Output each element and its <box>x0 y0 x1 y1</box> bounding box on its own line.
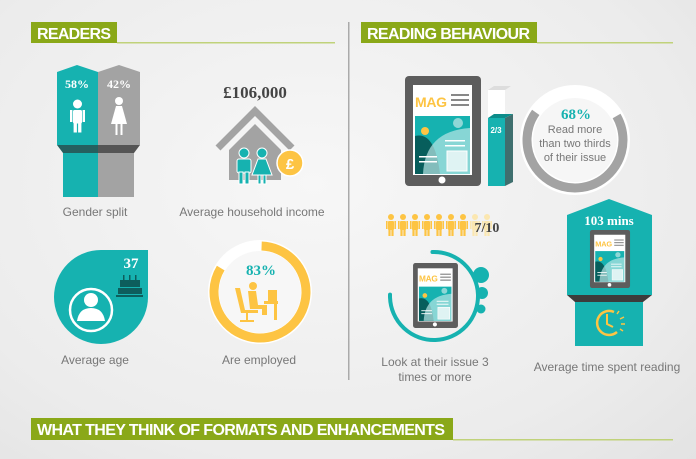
panel: employed: Are employed <box>222 353 296 367</box>
panel: read two thirds: Read more <box>548 124 602 136</box>
panel: gender split <box>57 65 140 219</box>
panel: employed <box>208 240 312 367</box>
panel: look three times: 7/10 <box>475 221 499 236</box>
panel: time spent reading: 103 mins <box>584 213 634 228</box>
heading: reading behaviour: READING BEHAVIOUR <box>367 26 530 43</box>
panel: employed: 83% <box>246 263 276 279</box>
heading: formats and enhancements: WHAT THEY THINK OF FORMATS AND ENHANCEMENTS <box>37 422 445 439</box>
heading: reading behaviour <box>361 22 673 44</box>
panel: average age: 37 <box>124 256 139 272</box>
panel: household income <box>179 83 325 219</box>
panel: read two thirds: of their issue <box>544 152 606 164</box>
panel: household income: £106,000 <box>223 83 287 102</box>
panel: read two thirds: 68% <box>561 107 591 123</box>
panel: read two thirds: than two thirds <box>539 138 611 150</box>
panel: gender split: 42% <box>107 77 131 91</box>
panel: look three times: Look at their issue 3 <box>381 355 489 369</box>
heading: formats and enhancements <box>31 418 673 440</box>
heading: readers <box>31 22 335 44</box>
panel: household income: Average household income <box>179 205 325 219</box>
panel: gender split: 58% <box>65 77 89 91</box>
panel: average age: Average age <box>61 353 129 367</box>
panel: time spent reading: Average time spent reading <box>534 360 680 374</box>
heading: readers: READERS <box>37 26 111 43</box>
panel: look three times: times or more <box>398 370 472 384</box>
panel: time spent reading <box>534 199 680 374</box>
divider <box>348 22 350 380</box>
panel: gender split: Gender split <box>63 205 128 219</box>
panel: read two thirds: 2/3 <box>490 126 502 135</box>
panel: average age <box>54 250 148 367</box>
panel: household income: £ <box>286 156 295 173</box>
panel: read two thirds <box>405 74 641 206</box>
panel: look three times <box>381 214 499 384</box>
